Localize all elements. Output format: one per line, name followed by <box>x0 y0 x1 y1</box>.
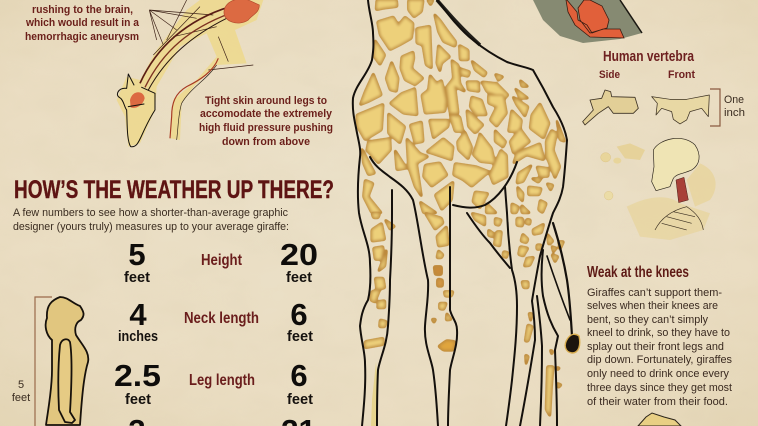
neck cross-section: grey mane and red vessels <box>533 0 642 43</box>
one inch bracket <box>710 89 720 126</box>
red vertebra <box>566 0 624 38</box>
comparison row: leg length: 2.5 <box>114 358 161 393</box>
text block: knees explanation: selves when their knees are <box>587 300 718 312</box>
neck vessels <box>140 0 253 90</box>
comparison row: height: 20 <box>280 237 318 272</box>
icon: vertebra side view <box>583 90 638 125</box>
height label <box>12 379 30 404</box>
heading: human vertebra: Human vertebra <box>603 48 695 65</box>
intro text: designer (yours truly) measures up to your average giraffe: <box>13 221 289 233</box>
comparison row: height: feet <box>286 269 312 286</box>
illustration: human skeleton with neck <box>601 138 716 240</box>
person arm <box>58 339 75 423</box>
comparison row: height: 5 <box>128 237 146 272</box>
comparison row: neck length: feet <box>287 328 313 345</box>
diagram: giraffe circulation, bending head <box>117 0 263 147</box>
label: side: Side <box>599 69 620 81</box>
comparison row: leg length: Leg length <box>189 372 255 389</box>
comparison row: leg length: feet <box>287 391 313 408</box>
text block: knees explanation: kneel to drink, so they have to <box>587 327 730 339</box>
height bracket <box>35 297 52 426</box>
callout: tight leg skin: accomodate the extremely <box>200 108 333 120</box>
heading: weak at the knees: Weak at the knees <box>587 264 689 281</box>
comparison row: neck length: inches <box>118 328 158 345</box>
leg pressure outline <box>170 58 218 140</box>
section heading: HOW’S THE WEATHER UP THERE? <box>14 176 334 204</box>
comparison row: neck length: 4 <box>129 297 147 332</box>
icon: vertebra front view <box>652 95 709 124</box>
intro text: A few numbers to see how a shorter-than-average graphic <box>13 207 288 219</box>
height label: 5 <box>18 379 24 391</box>
body outline <box>353 0 572 426</box>
comparison row: height: feet <box>124 269 150 286</box>
comparison row: neck length: 6 <box>290 297 308 332</box>
callout: tight leg skin: high fluid pressure pushing <box>199 122 333 134</box>
coffee stains <box>617 143 645 160</box>
label: front: Front <box>668 69 695 81</box>
text block: knees explanation: splay out their front legs and <box>587 341 724 353</box>
leg spots <box>365 213 564 416</box>
body spots <box>357 0 565 213</box>
callout: tight leg skin: down from above <box>222 136 310 148</box>
height label: feet <box>12 392 30 404</box>
person silhouette <box>46 297 88 425</box>
tail tassel <box>565 334 580 353</box>
head outline <box>117 74 155 147</box>
comparison row: clipped numbers <box>128 413 316 426</box>
label: one inch: One <box>724 94 744 106</box>
callout: aneurysm text: rushing to the brain, <box>32 4 133 16</box>
brain organ <box>130 92 145 108</box>
text block: knees explanation: bent, so they can’t simply <box>587 314 708 326</box>
grey tissue <box>533 0 642 43</box>
callout: aneurysm text: which would result in a <box>25 17 140 29</box>
text block: knees explanation: only need to drink once every <box>587 368 729 380</box>
comparison row: leg length: feet <box>125 391 151 408</box>
comparison row: height <box>124 237 318 286</box>
rib cage <box>655 207 703 230</box>
callout: tight leg skin: Tight skin around legs to <box>205 95 327 107</box>
text block: knees explanation: Giraffes can’t support them- <box>587 287 722 299</box>
callout: aneurysm text <box>25 4 140 43</box>
skull <box>652 138 699 191</box>
human height figure <box>12 297 88 426</box>
comparison row: height: Height <box>201 252 243 269</box>
intro text <box>13 207 289 233</box>
comparison row: leg length <box>114 358 313 408</box>
text block: knees explanation <box>587 287 732 408</box>
text block: knees explanation: three days since they get most <box>587 382 732 394</box>
yellow neck and head wash <box>117 0 263 147</box>
giraffe illustration <box>353 0 580 426</box>
neck shadow and mane <box>437 0 480 45</box>
callout: aneurysm text: hemorrhagic aneurysm <box>25 31 139 43</box>
text block: knees explanation: dip down. Fortunately, giraffes <box>587 354 732 366</box>
heart organ <box>224 0 259 23</box>
callout: tight leg skin <box>199 95 333 148</box>
text block: knees explanation: of their water from their food. <box>587 396 728 408</box>
pale lower-leg drip <box>371 362 378 426</box>
label: one inch <box>724 94 745 119</box>
neck vertebrae <box>676 177 688 203</box>
label: one inch: inch <box>724 107 745 119</box>
comparison row: leg length: 6 <box>290 358 308 393</box>
comparison row: neck length: Neck length <box>184 310 259 327</box>
icon: drinking giraffe head, clipped <box>638 413 681 426</box>
comparison row: neck length <box>118 297 313 345</box>
